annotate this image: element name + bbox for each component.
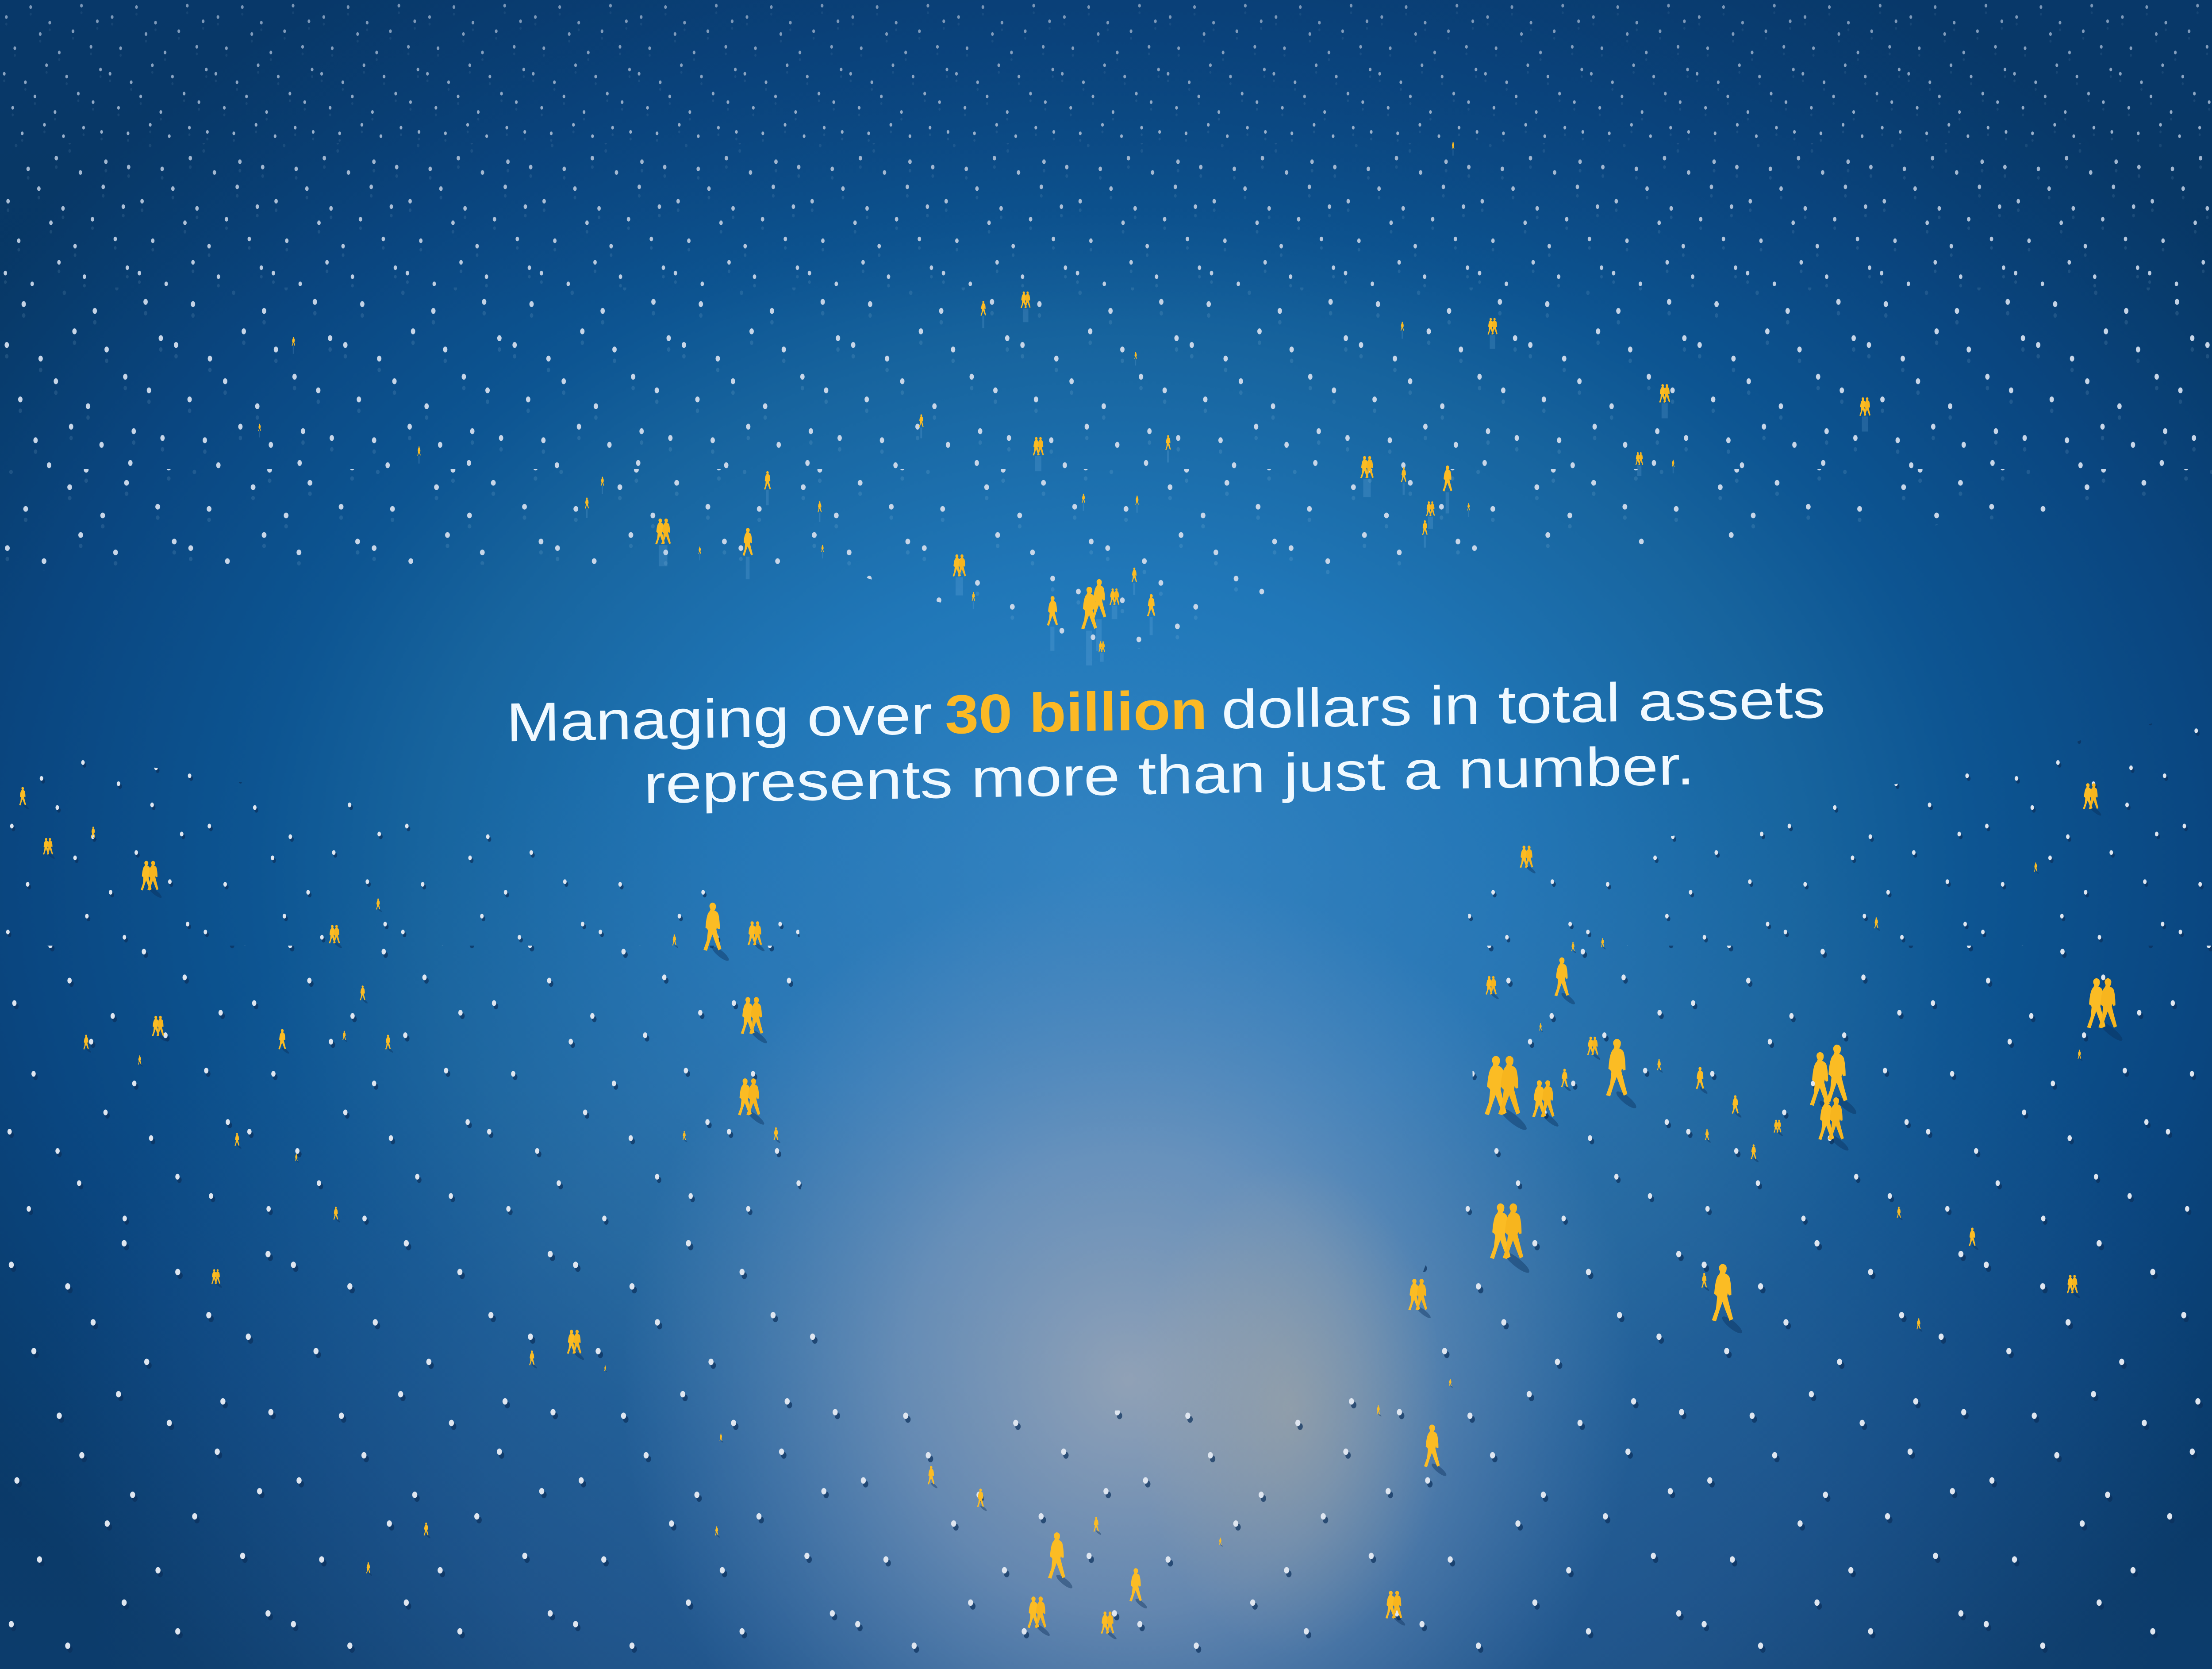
- dot field: upper crowd of white markers: [0, 0, 2212, 662]
- yellow figures: upper group: [258, 142, 1870, 665]
- yellow figures: left group: [19, 787, 781, 1373]
- headline line 2: represents more than just a number.: [643, 735, 1695, 815]
- highlighted figure: 30 billion: 30 billion: [945, 680, 1208, 746]
- headline text: [506, 669, 1826, 818]
- headline line 1 start: Managing over: [506, 685, 933, 754]
- yellow figures: bottom group: [366, 1379, 1453, 1641]
- yellow figures: right group: [1408, 783, 2124, 1336]
- headline line 1 end: dollars in total assets: [1221, 669, 1825, 741]
- dot field: lower crowd of white markers: [0, 700, 2212, 1669]
